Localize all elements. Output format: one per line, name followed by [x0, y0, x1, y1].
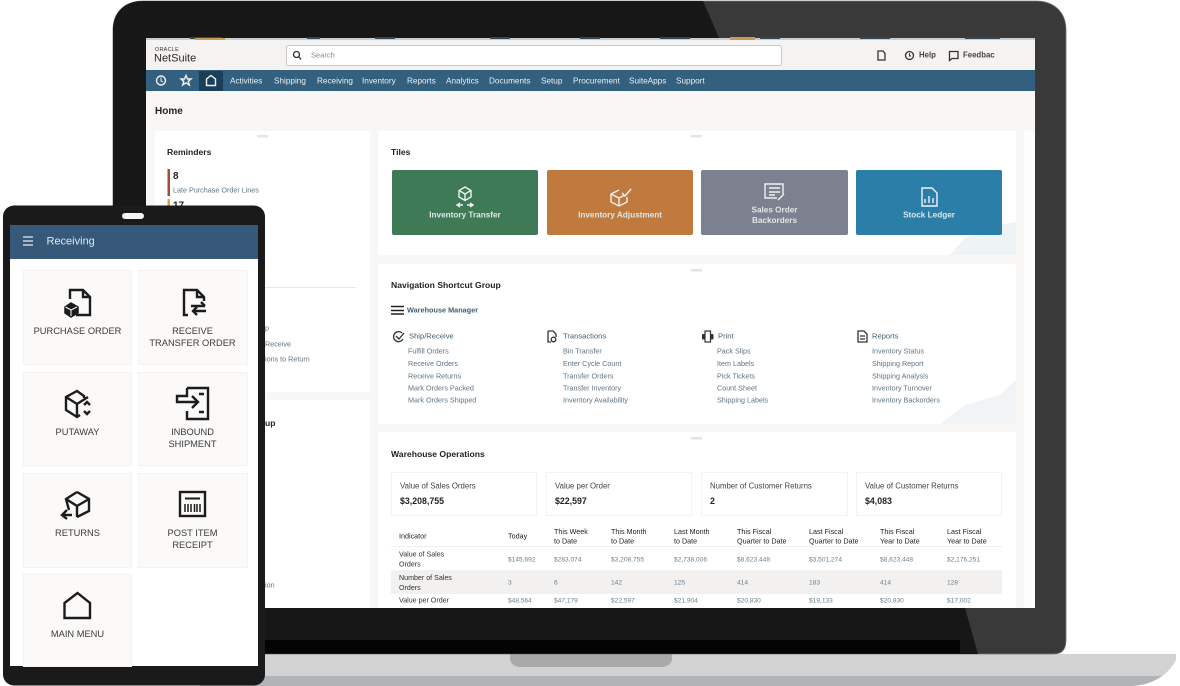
navigation bar: Analytics: [446, 77, 479, 86]
menu tile: receive transfer order: RECEIVE: [172, 326, 213, 336]
row: number of sales orders: 128: [947, 579, 958, 586]
menu tile: receive transfer order: TRANSFER ORDER: [149, 338, 236, 348]
column: ship/receive: Mark Orders Packed: [408, 383, 474, 392]
kpi: value of sales orders: [392, 472, 536, 516]
kpi: value per order: Value per Order: [555, 482, 610, 491]
tile: sales order backorders: [701, 170, 848, 235]
row: value per order: $21,904: [674, 597, 698, 604]
row: value of sales orders: Orders: [399, 560, 421, 568]
column: ship/receive: Ship/Receive: [409, 332, 454, 340]
navigation bar: Documents: [489, 77, 530, 86]
panel: warehouse operations: Warehouse Operations: [391, 449, 485, 459]
menu tile: post item receipt: POST ITEM: [168, 528, 217, 538]
column: ship/receive: Mark Orders Shipped: [408, 395, 476, 404]
panel: reminders: ions to Return: [265, 354, 310, 363]
panel: reminders: [155, 131, 370, 392]
table header: Indicator: [399, 531, 427, 540]
logo: ORACLE: [155, 47, 179, 53]
tile: inventory adjustment: Inventory Adjustment: [578, 211, 662, 220]
column: reports: Inventory Backorders: [872, 395, 940, 404]
table header: Year to Date: [947, 536, 987, 545]
column: reports: Inventory Turnover: [872, 383, 933, 392]
tile: inventory transfer: Inventory Transfer: [429, 211, 502, 220]
column: print: Count Sheet: [717, 383, 757, 392]
row: value per order: $20,830: [737, 597, 761, 604]
menu tile: inbound shipment: SHIPMENT: [168, 439, 217, 449]
column: transactions: Transfer Inventory: [563, 383, 621, 392]
row: value per order: Value per Order: [399, 596, 450, 604]
navigation bar: Inventory: [362, 77, 397, 86]
kpi: value of customer returns: Value of Customer Returns: [865, 482, 959, 491]
laptop body: [113, 1, 1066, 654]
panel: lower left: ion: [265, 580, 275, 589]
tablet camera notch: [122, 213, 144, 219]
kpi: value of customer returns: [856, 472, 1002, 516]
navigation bar: Shipping: [274, 77, 306, 86]
panel: reminders: Reminders: [167, 147, 212, 157]
table header: Quarter to Date: [737, 536, 787, 545]
table header: Quarter to Date: [809, 536, 859, 545]
kpi: value of sales orders: $3,208,755: [400, 496, 444, 506]
row: value per order: $22,597: [611, 597, 635, 604]
row: number of sales orders: Number of Sales: [399, 574, 452, 582]
row: number of sales orders: Orders: [399, 584, 421, 592]
column: print: Shipping Labels: [717, 395, 769, 404]
header bar: [146, 40, 1035, 70]
top colored strip: [146, 37, 1035, 41]
panel: lower left: up: [265, 418, 276, 428]
menu tile: main menu: MAIN MENU: [51, 629, 104, 639]
kpi: value per order: [546, 472, 692, 516]
column: ship/receive: Fulfill Orders: [408, 346, 449, 355]
tablet header: [10, 225, 258, 259]
panel: reminders: p: [265, 323, 269, 332]
row: number of sales orders: [399, 574, 958, 592]
row: value per order: [399, 596, 971, 604]
column: reports: Inventory Status: [872, 346, 924, 355]
column: ship/receive: Receive Returns: [408, 371, 462, 380]
row: value per order: $19,133: [809, 597, 833, 604]
panel: reminders: Receive: [265, 339, 291, 348]
menu tile: inbound shipment: [138, 372, 248, 466]
kpi: value of sales orders: Value of Sales Orders: [400, 482, 476, 491]
warehouse manager menu: Warehouse Manager: [407, 305, 478, 314]
menu tile: purchase order: [24, 270, 132, 364]
navigation bar: Activities: [230, 77, 262, 86]
table header: This Month: [611, 527, 647, 536]
navigation bar: Setup: [541, 77, 563, 86]
table header: Year to Date: [880, 536, 920, 545]
panel: lower left: [155, 400, 370, 608]
row: value per order: $20,830: [880, 597, 904, 604]
tile: stock ledger: [856, 170, 1002, 235]
header actions: Feedbac: [963, 51, 995, 60]
row: number of sales orders: 125: [674, 579, 685, 586]
column: transactions: Transfer Orders: [563, 371, 614, 380]
table header: Last Fiscal: [947, 527, 982, 536]
right side strip: [1024, 131, 1035, 608]
kpi: value of customer returns: $4,083: [865, 496, 892, 506]
row: value of sales orders: Value of Sales: [399, 550, 445, 558]
column: print: Pack Slips: [717, 346, 751, 355]
panel: navigation shortcut group: Navigation Shortcut Group: [391, 280, 501, 290]
menu tile: post item receipt: RECEIPT: [172, 540, 213, 550]
tile: inventory transfer: [392, 170, 538, 235]
column: reports: Shipping Report: [872, 359, 924, 368]
panel: navigation shortcut group: [378, 264, 1016, 424]
panel: tiles: [378, 131, 1016, 255]
row: number of sales orders: 183: [809, 579, 820, 586]
menu tile: post item receipt: [138, 474, 248, 568]
row: value of sales orders: $8,623,448: [880, 556, 913, 563]
row: value of sales orders: $8,623,448: [737, 556, 770, 563]
navigation bar: Reports: [407, 77, 436, 86]
navigation bar: Support: [676, 77, 705, 86]
table header: Today: [508, 531, 528, 540]
row: value per order: $48,564: [508, 597, 532, 604]
menu tile: purchase order: PURCHASE ORDER: [34, 326, 122, 336]
column: print: Item Labels: [717, 359, 755, 368]
menu tile: returns: [24, 474, 132, 568]
menu tile: putaway: [24, 372, 132, 466]
table header: Last Month: [674, 527, 710, 536]
column: transactions: Inventory Availability: [563, 395, 628, 404]
row: value per order: $47,179: [554, 597, 578, 604]
column: transactions: Transactions: [563, 332, 606, 340]
table header: Last Fiscal: [809, 527, 844, 536]
menu tile: putaway: PUTAWAY: [56, 427, 99, 437]
column: transactions: Bin Transfer: [563, 346, 602, 355]
tile: inventory adjustment: [547, 170, 693, 235]
logo: [154, 47, 196, 64]
row: value of sales orders: $3,501,274: [809, 556, 842, 563]
column: transactions: [548, 331, 628, 404]
table header: This Week: [554, 527, 588, 536]
tile: sales order backorders: Sales Order: [752, 206, 798, 215]
kpi: number of customer returns: 2: [710, 496, 715, 506]
row: value of sales orders: $3,208,755: [611, 556, 644, 563]
row: value per order: $17,002: [947, 597, 971, 604]
row: value of sales orders: $283,074: [554, 556, 582, 563]
column: print: Print: [718, 332, 735, 340]
header actions: [878, 51, 995, 60]
table header: This Fiscal: [880, 527, 915, 536]
column: reports: Shipping Analysis: [872, 371, 929, 380]
navigation bar: Procurement: [573, 77, 621, 86]
row: value of sales orders: $145,692: [508, 556, 536, 563]
laptop base: [200, 654, 1176, 686]
column: print: Pick Tickets: [717, 371, 755, 380]
table header: to Date: [674, 536, 697, 545]
page heading: Home: [155, 106, 183, 117]
navigation bar: [146, 70, 1035, 91]
navigation bar: Receiving: [317, 77, 353, 86]
search box: [286, 46, 782, 66]
row: number of sales orders: 414: [880, 579, 891, 586]
panel: reminders: 17: [173, 201, 185, 212]
table: indicators: [391, 527, 1002, 604]
kpi: value per order: $22,597: [555, 496, 587, 506]
tablet screen: [10, 225, 258, 666]
row: number of sales orders: 6: [554, 579, 558, 586]
laptop screen: [146, 37, 1035, 608]
menu tile: receive transfer order: [138, 270, 248, 364]
column: transactions: Enter Cycle Count: [563, 359, 621, 368]
row: number of sales orders: 414: [737, 579, 748, 586]
table header: This Fiscal: [737, 527, 772, 536]
row: number of sales orders: 142: [611, 579, 622, 586]
row: value of sales orders: $2,176,251: [947, 556, 980, 563]
column: ship/receive: [394, 332, 476, 404]
column: reports: [858, 331, 940, 404]
menu tile: returns: RETURNS: [55, 528, 100, 538]
panel: reminders: 8: [173, 171, 179, 182]
row: number of sales orders: 3: [508, 579, 512, 586]
menu tile: main menu: [24, 574, 132, 666]
tablet header: Receiving: [46, 235, 95, 247]
column: reports: Reports: [872, 332, 899, 340]
panel: reminders: Late Purchase Order Lines: [173, 185, 259, 194]
tablet: [3, 206, 265, 686]
tile: stock ledger: Stock Ledger: [903, 211, 956, 220]
table header: to Date: [611, 536, 634, 545]
row: value of sales orders: $2,738,006: [674, 556, 707, 563]
logo: NetSuite: [154, 52, 196, 64]
table header: [399, 527, 987, 545]
menu tile: inbound shipment: INBOUND: [171, 427, 214, 437]
search box: Search: [311, 50, 335, 59]
tile: sales order backorders: Backorders: [752, 216, 797, 225]
table header: to Date: [554, 536, 577, 545]
row: value of sales orders: [399, 550, 980, 568]
header actions: Help: [919, 51, 936, 60]
panel: tiles: Tiles: [391, 147, 411, 157]
panel: warehouse operations: [378, 432, 1016, 608]
kpi: number of customer returns: Number of Customer Returns: [710, 482, 812, 491]
navigation bar: SuiteApps: [629, 77, 666, 86]
kpi: number of customer returns: [702, 472, 848, 516]
column: print: [702, 331, 769, 404]
column: ship/receive: Receive Orders: [408, 359, 458, 368]
